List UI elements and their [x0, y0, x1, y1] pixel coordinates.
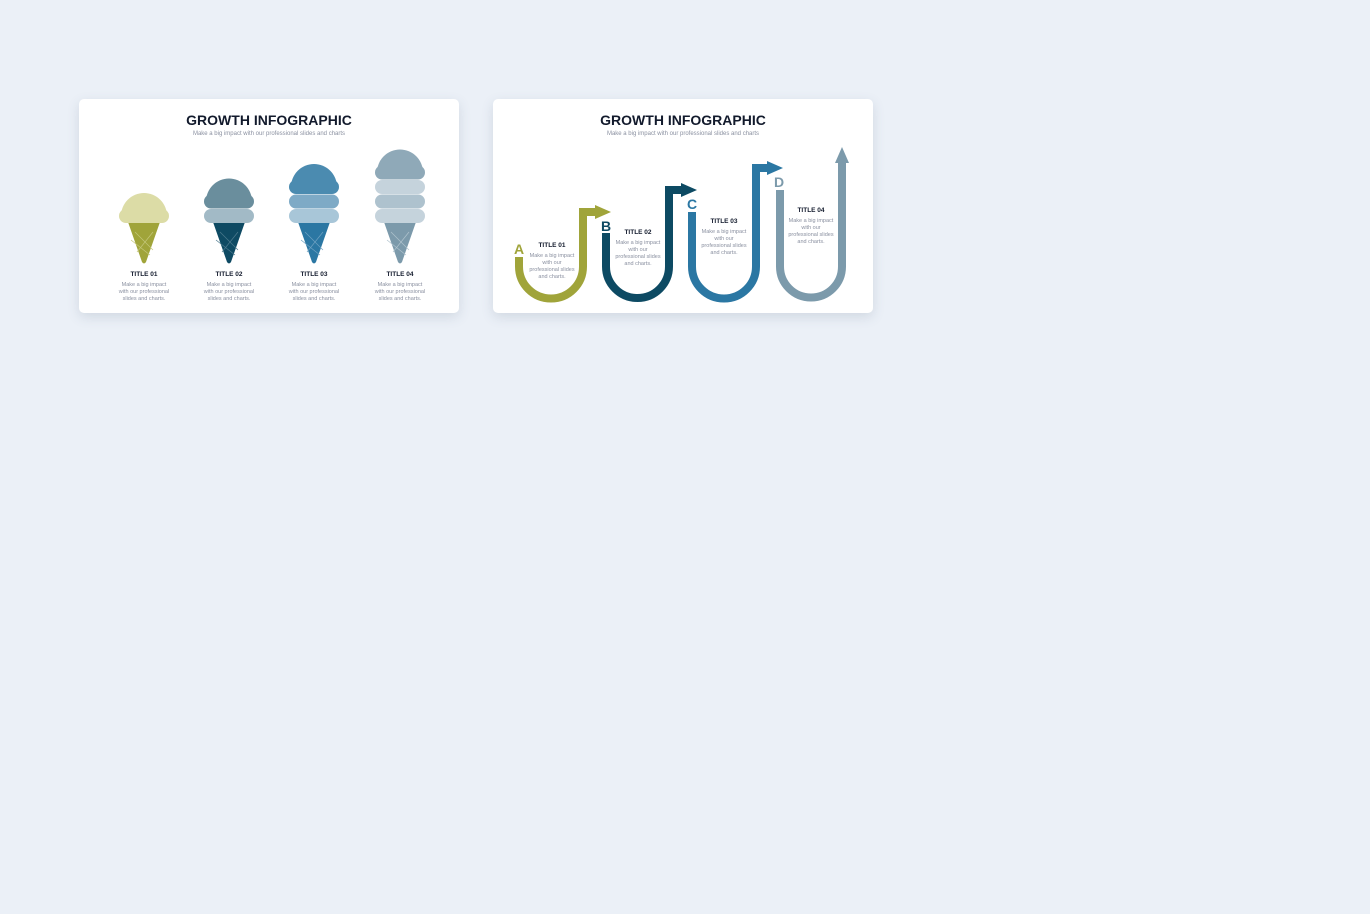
text blocks: cones: TITLE 01	[130, 271, 158, 278]
icon: cone 2	[204, 179, 254, 264]
title right	[600, 112, 766, 137]
text blocks: cones: with our professional	[118, 289, 169, 295]
text blocks: arrows: with our	[627, 247, 648, 253]
title left: GROWTH INFOGRAPHIC	[186, 112, 352, 128]
text blocks: arrows: with our	[713, 236, 734, 242]
text blocks: arrows: TITLE 04	[797, 207, 825, 214]
text blocks: cones: with our professional	[203, 289, 254, 295]
arrow D: D	[774, 174, 784, 190]
arrow A	[514, 205, 611, 298]
text blocks: cones: slides and charts.	[208, 296, 251, 302]
panel: ice cream growth	[79, 99, 459, 313]
icon: cone 3	[289, 164, 339, 264]
text blocks: arrows: with our	[800, 225, 821, 231]
text blocks: arrows: professional slides	[701, 243, 747, 249]
text blocks: arrows: and charts.	[538, 274, 566, 280]
text blocks: arrows: Make a big impact	[789, 218, 834, 224]
panel: arrow growth	[493, 99, 873, 313]
text blocks: cones: TITLE 04	[386, 271, 414, 278]
title left	[186, 112, 352, 137]
text blocks: arrows: Make a big impact	[530, 253, 575, 259]
text blocks: arrows: and charts.	[710, 250, 738, 256]
title left: Make a big impact with our professional slides and charts	[193, 131, 345, 137]
text blocks: arrows: with our	[541, 260, 562, 266]
arrow B	[601, 183, 697, 298]
arrow D	[774, 147, 849, 298]
arrow C	[687, 161, 783, 298]
text blocks: arrows: professional slides	[529, 267, 575, 273]
icon: cone 4	[375, 150, 425, 264]
text blocks: arrows: and charts.	[797, 239, 825, 245]
text blocks: cones: Make a big impact	[207, 282, 252, 288]
title right: GROWTH INFOGRAPHIC	[600, 112, 766, 128]
text blocks: cones: with our professional	[374, 289, 425, 295]
text blocks: arrows: professional slides	[615, 254, 661, 260]
text blocks: cones: slides and charts.	[293, 296, 336, 302]
text blocks: arrows: and charts.	[624, 261, 652, 267]
text blocks: cones: Make a big impact	[378, 282, 423, 288]
text blocks: cones: Make a big impact	[122, 282, 167, 288]
text blocks: cones: with our professional	[288, 289, 339, 295]
text blocks: arrows: TITLE 01	[538, 242, 566, 249]
arrow B: B	[601, 218, 611, 234]
text blocks: arrows: TITLE 03	[710, 218, 738, 225]
arrow A: A	[514, 241, 524, 257]
title right: Make a big impact with our professional slides and charts	[607, 131, 759, 137]
text blocks: cones: TITLE 02	[215, 271, 243, 278]
text blocks: arrows	[529, 207, 834, 280]
text blocks: arrows: professional slides	[788, 232, 834, 238]
text blocks: arrows: Make a big impact	[616, 240, 661, 246]
arrow C: C	[687, 196, 697, 212]
text blocks: cones: TITLE 03	[300, 271, 328, 278]
icon: cone 1	[119, 193, 169, 264]
text blocks: cones: Make a big impact	[292, 282, 337, 288]
text blocks: cones: slides and charts.	[123, 296, 166, 302]
text blocks: arrows: TITLE 02	[624, 229, 652, 236]
text blocks: cones	[118, 271, 425, 302]
text blocks: arrows: Make a big impact	[702, 229, 747, 235]
text blocks: cones: slides and charts.	[379, 296, 422, 302]
